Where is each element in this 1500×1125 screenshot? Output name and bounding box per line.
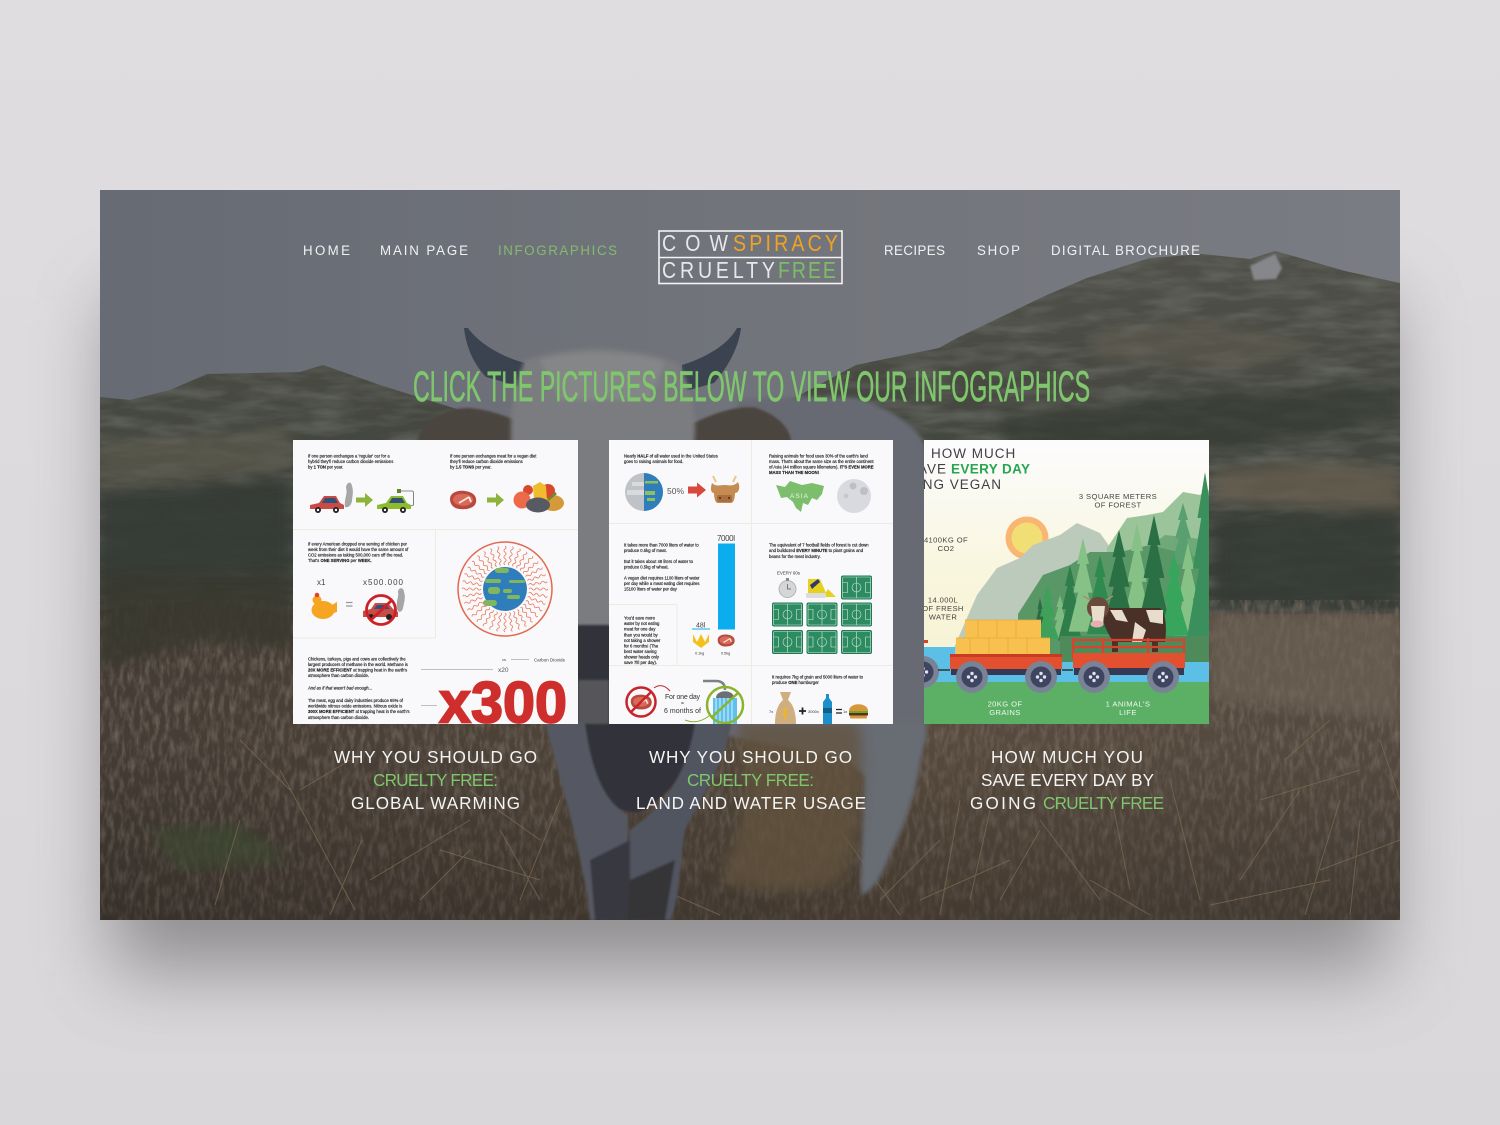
icon: football fields grid <box>772 576 872 654</box>
text: water per kg: 15100 liters of water per day <box>624 586 678 592</box>
cow belly fleece <box>720 722 862 892</box>
comparison legend: Carbon Dioxide <box>534 658 566 662</box>
label: forest <box>1079 492 1157 510</box>
navigation right: SHOP <box>977 243 1020 258</box>
bar chart: water use: 48l <box>696 622 706 630</box>
infographic card: how much you save <box>895 440 1223 724</box>
text: half of water: Nearly HALF of all water used in the United States <box>624 454 718 458</box>
text: hamburger <box>772 674 864 685</box>
text: hybrid car: by 1 TON per year. <box>308 464 343 470</box>
text: football fields <box>769 542 869 559</box>
text: hybrid car: If one person exchanges a 'regular' car for a <box>308 454 390 458</box>
text: land mass <box>769 454 874 475</box>
equation: grain plus water equals burger: 7x <box>769 709 773 714</box>
logo: CRUELTY <box>662 258 775 283</box>
icon: asia map <box>776 481 824 512</box>
cow on trailer <box>1083 596 1166 652</box>
caption: how much you save: CRUELTY FREE <box>1043 793 1164 813</box>
label: x500.000: x500.000 <box>363 578 404 587</box>
text: methane: 20X MORE EFFICIENT at trapping heat in the earth's <box>308 668 407 672</box>
text: methane: Chickens, turkeys, pigs and cows are collectively the <box>308 656 406 662</box>
text: football fields: The equivalent of 7 football fields of forest is cut down <box>769 542 869 548</box>
label: animal: LIFE <box>1119 708 1137 717</box>
text: shower saving: for 6 months! (The <box>624 644 659 648</box>
caption: how much you save: SAVE EVERY DAY BY <box>981 770 1154 790</box>
text: methane: worldwide nitrous oxide emissions. Nitrous oxide is <box>308 704 402 708</box>
text: water per kg: But it takes about 48 liters of water to <box>624 559 694 564</box>
label: co2: 4100KG OF <box>924 536 968 544</box>
cow far leg <box>861 722 925 895</box>
text: one day equals six months <box>664 694 701 715</box>
text: one serving: CO2 emissions as taking 500,000 cars off the road. <box>308 552 403 558</box>
label: animal: 1 ANIMAL'S <box>1106 700 1150 708</box>
text: hybrid car: hybrid they'll reduce carbon dioxide emissions <box>308 459 393 464</box>
equation: grain plus water equals burger <box>769 692 868 724</box>
text: shower saving: water by not eating <box>624 621 660 626</box>
text: methane: atmosphere than carbon dioxide. <box>308 715 369 720</box>
text: hamburger: It requires 7kg of grain and 5000 liters of water to <box>772 674 864 680</box>
hay bales <box>956 620 1050 654</box>
text: methane: atmosphere than carbon dioxide. <box>308 673 369 678</box>
text: methane: The meat, egg and dairy industries produce 65% of <box>308 698 404 703</box>
arrow: car to hybrid <box>356 493 373 507</box>
big number x300: x300 <box>439 670 567 736</box>
text: land mass: of Asia (44 million square kilometers). IT'S EVEN MORE <box>769 464 874 470</box>
icon: half-filled globe <box>625 473 663 511</box>
meadow <box>924 682 1209 724</box>
text: one serving: That's ONE SERVING per WEEK. <box>308 558 372 563</box>
navigation right: RECIPES <box>884 243 945 258</box>
text: land mass: Raising animals for food uses 30% of the earth's land <box>769 454 868 458</box>
text: land mass: mass. That's about the same size as the entire continent <box>769 459 874 464</box>
text: methane: largest producers of methane in the world. Methane is <box>308 662 408 667</box>
cow body <box>728 394 928 775</box>
text: methane <box>307 656 410 720</box>
caption: global warming: WHY YOU SHOULD GO <box>334 747 537 767</box>
navigation left: INFOGRAPHICS <box>498 243 617 258</box>
label: grains: GRAINS <box>989 708 1021 717</box>
icon: steak <box>450 491 476 509</box>
forest <box>1034 472 1223 641</box>
equals sign <box>346 602 352 606</box>
title: HOW MUCH <box>931 446 1016 461</box>
icon: green hybrid car <box>377 489 414 513</box>
label: 50%: 50% <box>667 486 684 496</box>
caption: global warming: CRUELTY FREE: <box>373 770 498 790</box>
logo <box>659 231 842 284</box>
icon: no meat <box>626 686 670 716</box>
trailer with hay <box>950 654 1073 693</box>
icon: cow head <box>711 476 739 503</box>
cow ears <box>418 407 792 445</box>
caption: global warming <box>334 747 537 813</box>
text: land mass: MASS THAN THE MOON! <box>769 470 819 475</box>
label: grains <box>988 700 1022 717</box>
text: one serving: If every American dropped one serving of chicken per <box>308 542 408 546</box>
text: one day equals six months: For one day <box>665 694 700 701</box>
caption: land and water: WHY YOU SHOULD GO <box>649 747 852 767</box>
text: vegan diet: they'll reduce carbon dioxide emissions <box>450 459 523 464</box>
mountains <box>953 490 1209 665</box>
text: one serving <box>308 542 409 563</box>
text: water per kg: per day while a meat eating diet requires <box>624 581 699 586</box>
text: hybrid car <box>308 454 393 470</box>
logo: COW <box>662 231 729 256</box>
icon: asia map: ASIA <box>790 493 809 500</box>
text: one serving: week from their diet it would have the same amount of <box>308 547 409 552</box>
caption: how much you save: HOW MUCH YOU <box>991 747 1143 767</box>
navigation right: DIGITAL BROCHURE <box>1051 243 1200 258</box>
title: EVERY DAY <box>951 462 1031 476</box>
infographic card: land and water usage <box>609 440 893 724</box>
cow front legs <box>545 722 732 920</box>
label: co2 <box>924 536 968 553</box>
text: shower saving: You'd save more <box>624 616 656 620</box>
text: vegan diet: If one person exchanges meat for a vegan diet <box>450 454 537 458</box>
text: methane: 300X MORE EFFICIENT at trapping heat in the earth's <box>308 709 410 714</box>
text: shower saving: meat for one day <box>624 626 656 632</box>
navigation left: HOME <box>303 243 350 258</box>
icon: no shower <box>685 681 743 724</box>
icon: crossed-out car <box>363 588 405 624</box>
infographic card: global warming <box>293 440 578 736</box>
cow muzzle <box>570 625 700 812</box>
equation: grain plus water equals burger: 3000x <box>808 709 819 714</box>
text: football fields: and bulldozed EVERY MINUTE to plant grains and <box>769 548 864 553</box>
icon: red car with smoke <box>310 483 353 513</box>
icon: moon <box>837 479 871 513</box>
caption: global warming: GLOBAL WARMING <box>351 793 520 813</box>
logo: SPIRACY <box>733 231 838 256</box>
label: co2: CO2 <box>938 544 954 553</box>
icon: vegetables <box>514 482 564 512</box>
cow photograph <box>418 328 929 920</box>
text: water per kg: produce 0.5kg of meat. <box>624 548 667 553</box>
label: water <box>922 596 964 622</box>
label: grains: 20KG OF <box>988 700 1022 708</box>
text: water per kg: produce 0.5kg of wheat. <box>624 564 669 570</box>
text: vegan diet: by 1.5 TONS per year. <box>450 464 492 470</box>
text: shower saving: best water saving <box>624 649 657 654</box>
text: vegan diet <box>450 454 537 470</box>
text: shower saving: shower heads only <box>624 654 660 660</box>
icon: bulldozer <box>806 579 836 598</box>
text: water per kg: A vegan diet requires 1100 liters of water <box>624 576 700 580</box>
navigation left: MAIN PAGE <box>380 243 468 258</box>
text: half of water <box>624 454 718 464</box>
bar chart: water use <box>692 534 735 656</box>
text: half of water: goes to raising animals for food. <box>624 459 683 464</box>
bar chart: water use: 0.5kg <box>721 652 730 656</box>
text: water per kg: It takes more than 7000 liters of water to <box>624 542 699 548</box>
caption: how much you save <box>970 747 1164 813</box>
panel shadow <box>112 300 1388 970</box>
label: x1: x1 <box>317 578 326 587</box>
text: football fields: beans for the meat industry. <box>769 554 821 559</box>
text: methane: And as if that wasn't bad enough... <box>307 686 372 690</box>
text: one day equals six months: = <box>681 701 684 707</box>
label: water: 14.000L <box>928 596 958 604</box>
title: SAVE <box>908 462 947 476</box>
sky <box>100 190 1400 422</box>
icon: stopwatch <box>777 570 801 598</box>
navigation right <box>885 246 1200 255</box>
website screenshot panel <box>100 190 1400 920</box>
icon: chicken <box>312 593 337 619</box>
cow head <box>510 348 695 640</box>
text: hamburger: produce ONE hamburger <box>772 680 819 685</box>
tractor wheel <box>907 640 950 688</box>
text: shower saving: not taking a shower <box>624 638 661 643</box>
caption: how much you save: GOING <box>970 793 1036 813</box>
comparison legend: vs <box>502 657 506 662</box>
arrow: water to cow <box>688 482 706 498</box>
bar chart: water use: 7000l <box>717 534 735 543</box>
caption: land and water <box>636 747 866 813</box>
foreground dry grass <box>100 575 1400 920</box>
text: shower saving <box>624 616 661 665</box>
title: GOING VEGAN <box>895 477 1002 492</box>
background hills <box>100 250 1400 640</box>
caption: land and water: CRUELTY FREE: <box>687 770 814 790</box>
logo: FREE <box>778 258 836 283</box>
trailer with cow <box>1073 638 1185 693</box>
caption: land and water: LAND AND WATER USAGE <box>636 793 866 813</box>
cow horns <box>464 328 741 392</box>
label: water: OF FRESH <box>922 604 964 613</box>
text: one day equals six months: 6 months of <box>664 708 701 715</box>
text: shower saving: than you would by <box>624 632 659 638</box>
label: water: WATER <box>929 612 957 622</box>
comparison legend: x20 <box>498 667 509 674</box>
equation: grain plus water equals burger: 1x <box>843 709 847 714</box>
comparison legend <box>421 657 566 706</box>
river <box>924 647 1209 683</box>
icon: sun <box>1006 516 1048 560</box>
bar chart: water use: 0.1kg <box>695 652 704 656</box>
label: animal <box>1106 700 1150 717</box>
icon: stopwatch: EVERY 60s <box>777 570 801 576</box>
navigation left <box>304 246 616 255</box>
label: forest: OF FOREST <box>1094 500 1142 510</box>
label: forest: 3 SQUARE METERS <box>1079 492 1157 501</box>
text: shower saving: save 7l!l per day). <box>624 660 657 665</box>
icon: heated earth <box>458 542 552 636</box>
title <box>895 446 1031 492</box>
arrow: meat to vegetables <box>487 493 504 507</box>
text: water per kg <box>624 542 700 592</box>
